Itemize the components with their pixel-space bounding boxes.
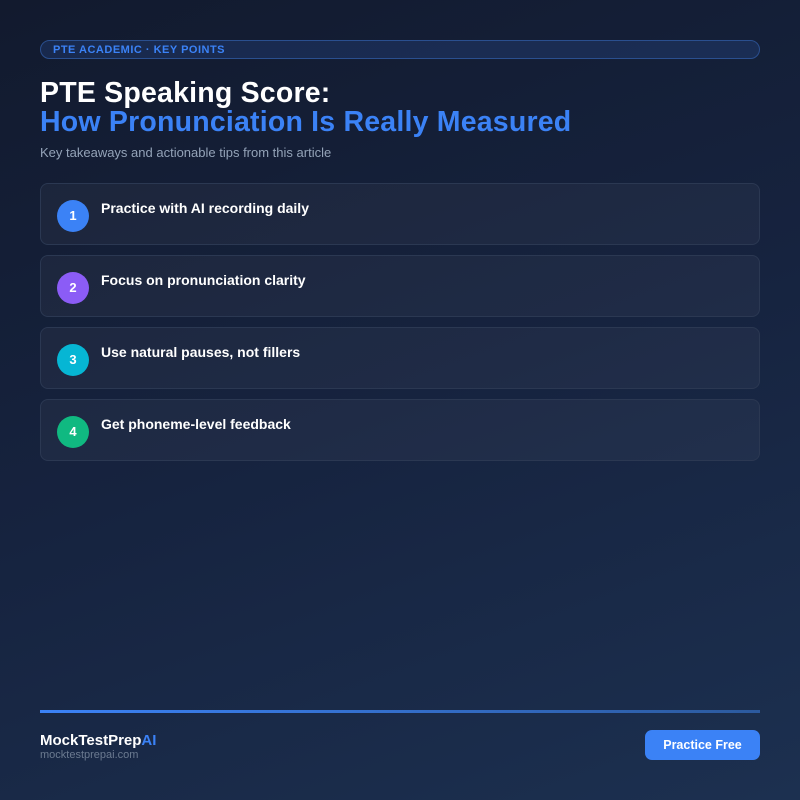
number 4 — [57, 416, 89, 448]
number 2 — [57, 272, 89, 304]
number 2: 2 — [69, 280, 77, 295]
subtitle: Key takeaways and actionable tips from this article — [40, 145, 331, 160]
card 3 — [40, 327, 760, 389]
badge: PTE ACADEMIC · KEY POINTS — [53, 44, 225, 56]
brand — [40, 732, 156, 761]
text 1: Practice with AI recording daily — [101, 200, 309, 216]
card 2 — [40, 255, 760, 317]
brand: MockTestPrepAI — [40, 732, 156, 749]
title: How Pronunciation Is Really Measured — [40, 106, 571, 138]
text 2: Focus on pronunciation clarity — [101, 272, 306, 288]
text 3: Use natural pauses, not fillers — [101, 344, 300, 360]
number 4: 4 — [69, 424, 77, 439]
card 1 — [40, 183, 760, 245]
title: PTE Speaking Score: — [40, 77, 330, 109]
button — [645, 730, 760, 760]
number 3: 3 — [69, 352, 77, 367]
number 3 — [57, 344, 89, 376]
number 1: 1 — [69, 208, 77, 223]
card 4 — [40, 399, 760, 461]
brand: mocktestprepai.com — [40, 749, 138, 761]
button: Practice Free — [663, 738, 742, 752]
title — [40, 77, 571, 138]
number 1 — [57, 200, 89, 232]
text 4: Get phoneme-level feedback — [101, 416, 291, 432]
badge — [40, 40, 760, 59]
